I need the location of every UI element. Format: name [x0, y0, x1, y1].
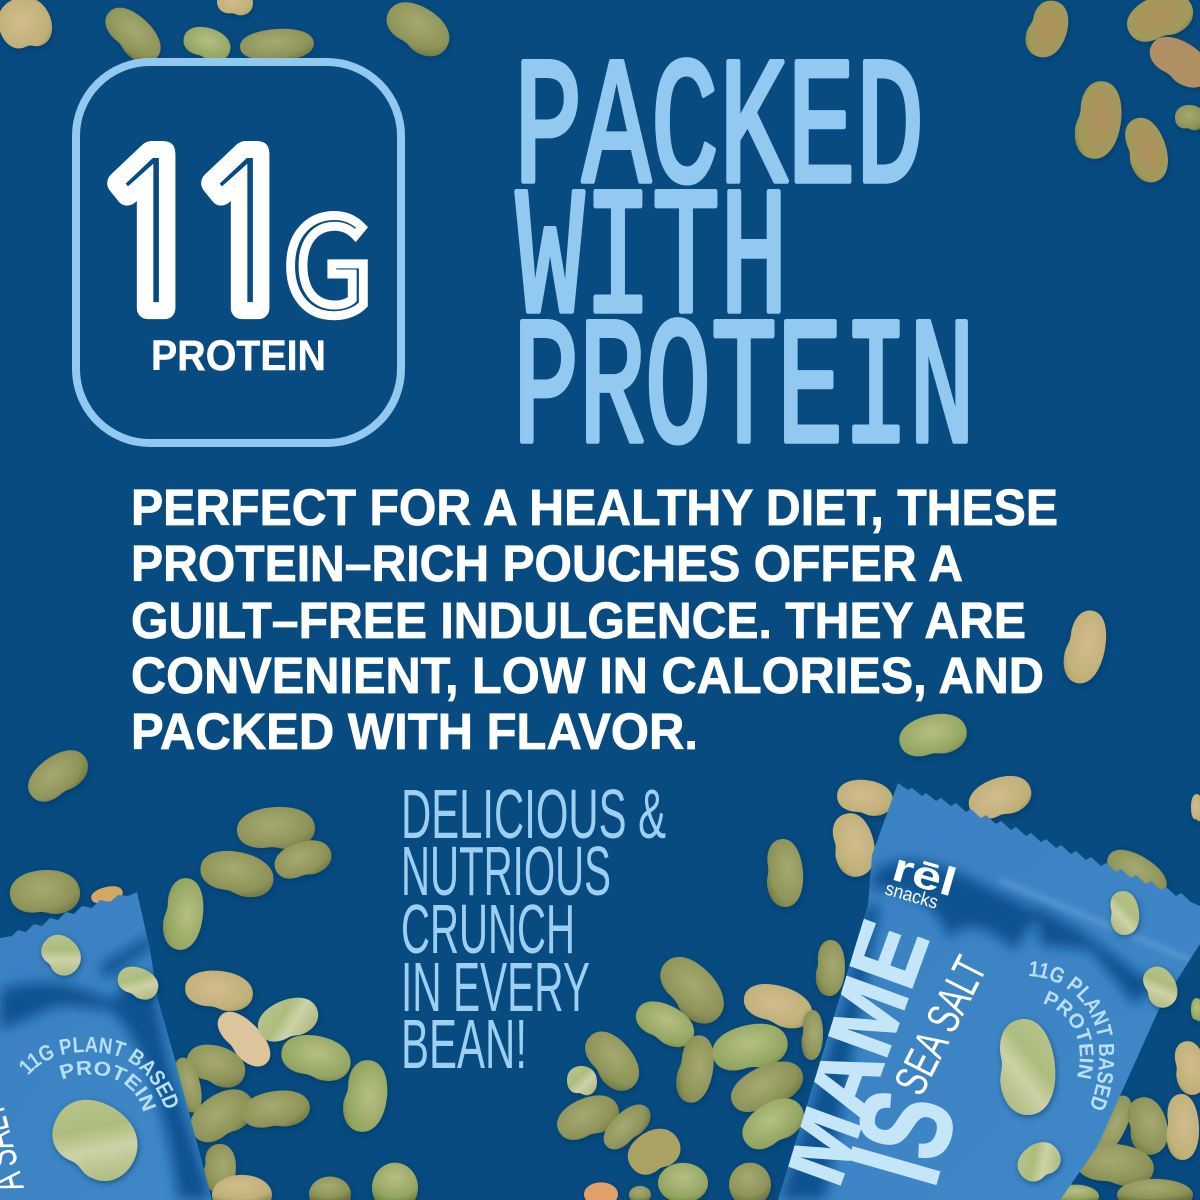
beans: behind right pouch	[762, 778, 1174, 1060]
badge unit G: G	[283, 162, 373, 353]
pack text: MAME IS	[788, 918, 953, 1186]
tagline	[401, 775, 666, 1083]
pack text: 11G plant based protein: PROTEIN	[1044, 990, 1094, 1079]
badge number 11: 1	[183, 132, 308, 342]
beans: top right corner	[1021, 0, 1200, 188]
title	[513, 31, 975, 496]
pack text: SEA SALT: SEA SALT	[884, 948, 997, 1103]
badge frame	[76, 62, 401, 443]
body text: PERFECT FOR A HEALTHY DIET, THESE	[131, 479, 1058, 536]
badge number 11	[89, 132, 308, 342]
beans: resting on pouches	[34, 889, 1184, 1192]
pack text: MAME IS: MAME	[754, 908, 949, 1197]
pouch fold shadows	[0, 935, 212, 1200]
pack text: brand: snacks	[883, 879, 940, 914]
body text: CONVENIENT, LOW IN CALORIES, AND	[131, 647, 1044, 704]
tagline: DELICIOUS &	[401, 775, 666, 853]
tagline: NUTRIOUS	[401, 832, 611, 910]
body text: GUILT–FREE INDULGENCE. THEY ARE	[131, 592, 1026, 649]
beans: lower centre pile	[551, 946, 817, 1200]
badge: 11g protein	[76, 62, 401, 443]
beans: middle scattered	[20, 607, 1200, 828]
body text: PROTEIN–RICH POUCHES OFFER A	[131, 535, 963, 592]
body text: PACKED WITH FLAVOR.	[131, 703, 698, 760]
pack text: MAME IS: IS	[821, 1076, 984, 1198]
beans: lower left pile	[8, 804, 418, 1200]
pack text: 11G plant based protein: PROTEIN	[59, 1061, 156, 1112]
beans: top edge	[0, 0, 458, 70]
title: PACKED	[514, 31, 924, 236]
title: WITH	[516, 161, 788, 366]
badge label: PROTEIN	[151, 332, 326, 380]
pack text: brand: rēl	[888, 845, 961, 905]
pack text: 11G plant based protein: 11G PLANT BASED	[1029, 961, 1114, 1110]
pouch: left product pack	[0, 892, 212, 1200]
tagline: BEAN!	[401, 1005, 527, 1083]
tagline: CRUNCH	[401, 890, 575, 968]
pack text: 11G plant based protein: 11G PLANT BASED	[20, 1036, 178, 1108]
pouch fold shadows	[780, 861, 1155, 1200]
beans: right of pouch	[1051, 998, 1200, 1200]
pouch: right product pack	[778, 783, 1200, 1200]
pack text: brand	[885, 860, 956, 908]
badge number 11: 1	[89, 132, 214, 342]
body text	[131, 479, 1058, 760]
tagline: IN EVERY	[401, 948, 590, 1026]
